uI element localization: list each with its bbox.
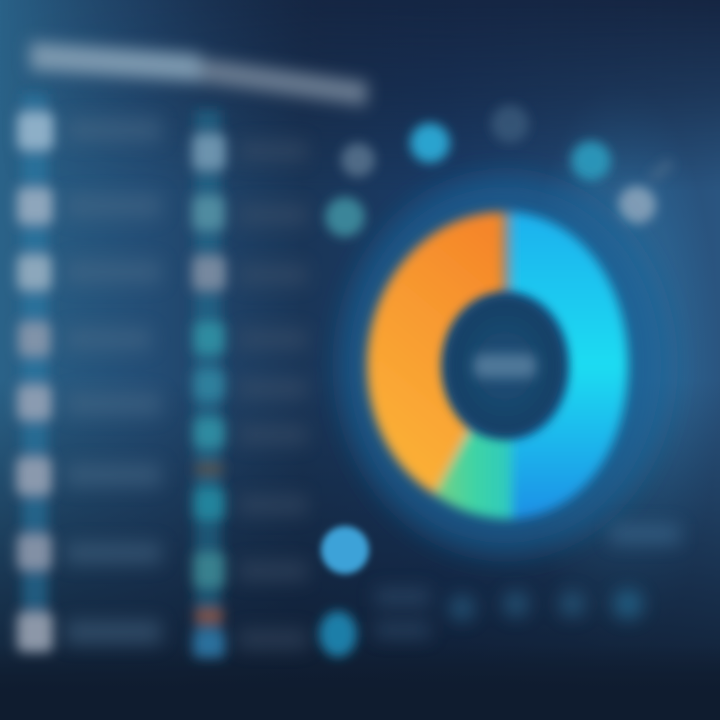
donut centre <box>445 295 565 437</box>
donut segments <box>367 212 628 519</box>
bottom indicators <box>319 526 369 657</box>
middle icon column <box>192 110 226 658</box>
donut halo <box>325 160 685 570</box>
left text rows <box>66 118 161 644</box>
left icon column <box>16 94 54 652</box>
title <box>30 42 368 106</box>
top indicators <box>325 105 675 237</box>
bottom legend <box>375 524 680 638</box>
centre label <box>474 354 536 378</box>
middle text rows <box>238 140 308 650</box>
donut chart <box>325 160 685 570</box>
